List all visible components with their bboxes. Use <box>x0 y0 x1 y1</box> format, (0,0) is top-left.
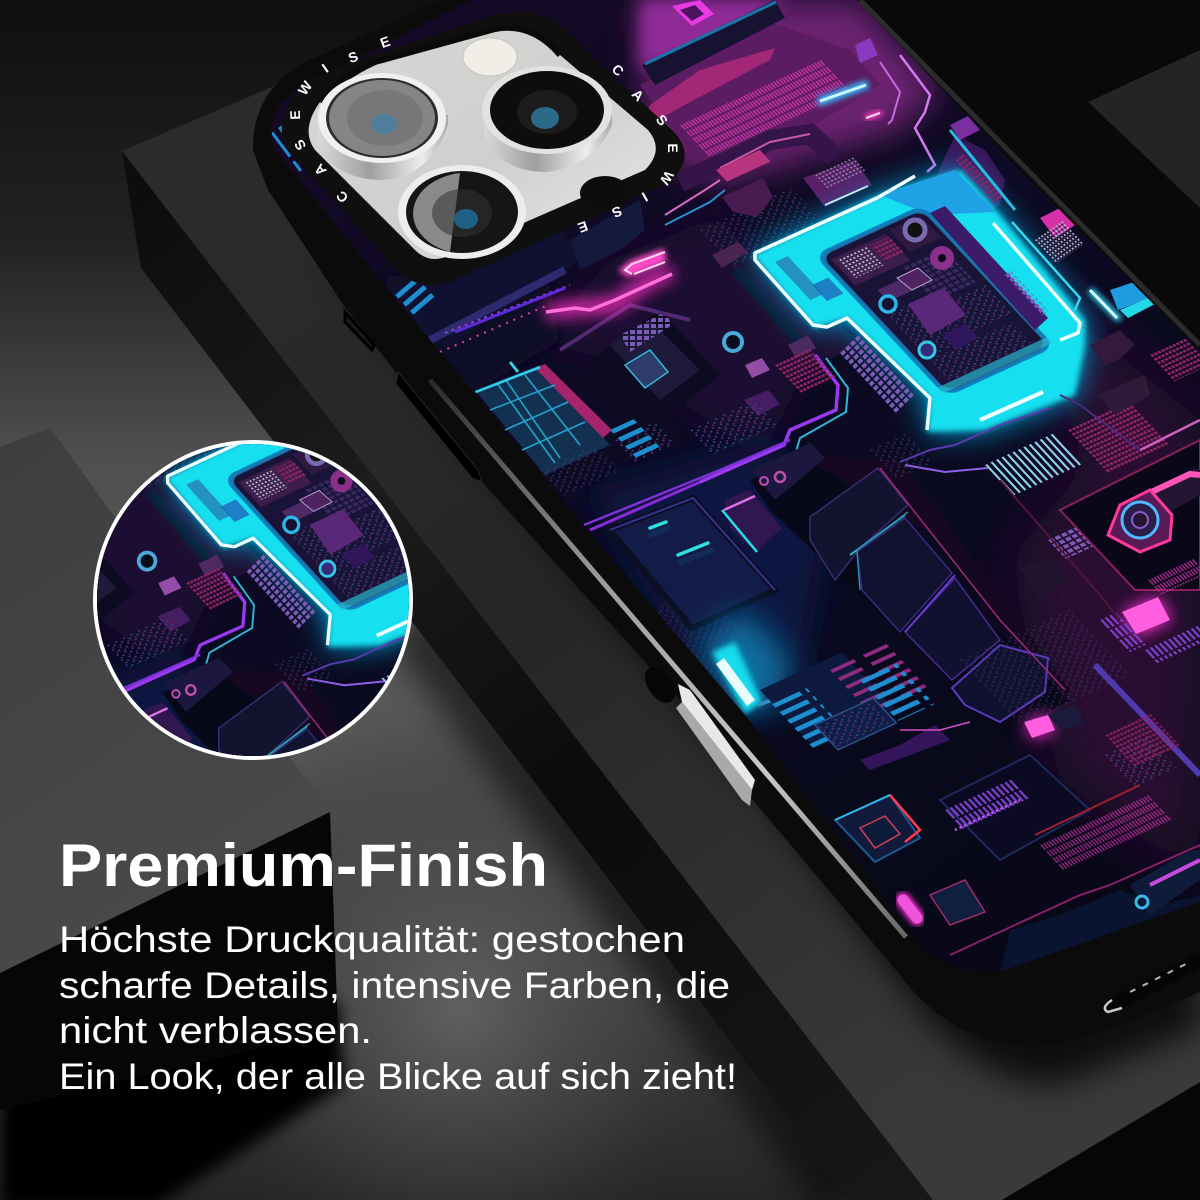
lens one base <box>318 115 448 180</box>
silver side button <box>676 684 755 806</box>
action button <box>345 312 374 350</box>
right rim <box>860 0 1200 345</box>
body text <box>59 919 737 1097</box>
case silhouette <box>253 0 1200 1047</box>
brand ring right: A <box>629 86 647 104</box>
printed art <box>240 0 1200 990</box>
brand ring left: E <box>378 33 392 51</box>
brand ring right: E <box>576 218 590 236</box>
lens two <box>482 66 612 172</box>
dark floor corner <box>1002 1082 1200 1200</box>
lens one <box>318 73 448 180</box>
lens three <box>398 165 526 259</box>
brand ring right: C <box>609 61 627 79</box>
phone case <box>240 0 1200 1047</box>
brand ring left: I <box>319 60 331 76</box>
camera island <box>282 12 685 285</box>
brand ring right: I <box>639 189 651 205</box>
line two: scharfe Details, intensive Farben, die <box>59 965 730 1006</box>
microphone hole <box>580 176 630 210</box>
brand ring right: W <box>656 168 677 189</box>
line three: nicht verblassen. <box>59 1010 372 1051</box>
lens one ring <box>318 73 446 163</box>
band soft shadow <box>413 623 849 1200</box>
line four: Ein Look, der alle Blicke auf sich zieht! <box>59 1056 737 1097</box>
plate shadow <box>320 28 560 102</box>
port lip <box>1105 1000 1122 1012</box>
brand ring left: S <box>291 137 309 153</box>
port sparkle <box>1130 962 1190 992</box>
brand ring right: E <box>665 143 681 153</box>
button lower face <box>676 702 752 806</box>
lens two ring <box>482 66 612 154</box>
button upper face <box>678 684 755 790</box>
volume side button <box>396 372 482 482</box>
camera plate <box>309 28 656 259</box>
charging port <box>1105 962 1197 1012</box>
zoom detail circle <box>93 440 413 760</box>
lower block front face <box>0 812 338 1110</box>
port opening <box>1112 962 1197 1006</box>
circle backing <box>93 440 413 760</box>
flash <box>463 38 517 76</box>
heading: Premium-Finish <box>59 832 548 899</box>
top-right backdrop <box>860 0 1200 360</box>
brand ring left: E <box>287 110 303 120</box>
magnified art <box>97 444 409 756</box>
button cutout <box>639 662 681 708</box>
brand ring left: S <box>346 48 360 66</box>
edge highlight <box>430 380 906 937</box>
lower block top surface <box>0 428 330 973</box>
brand ring left: A <box>311 161 329 179</box>
lower block shadow <box>0 1000 345 1200</box>
brand ring right <box>576 61 681 236</box>
lens three ring <box>398 165 526 259</box>
brand ring right: S <box>610 203 624 221</box>
lens two base <box>484 110 612 172</box>
line one: Höchste Druckqualität: gestochen <box>59 919 685 960</box>
phone shadow <box>330 260 1200 1085</box>
back block <box>1088 50 1200 208</box>
brand ring right: S <box>653 111 671 129</box>
brand ring left: C <box>333 188 351 206</box>
brand ring left <box>287 33 392 206</box>
upper block side face <box>122 151 940 1200</box>
brand ring left: W <box>295 77 316 98</box>
camera bezel <box>282 12 685 285</box>
